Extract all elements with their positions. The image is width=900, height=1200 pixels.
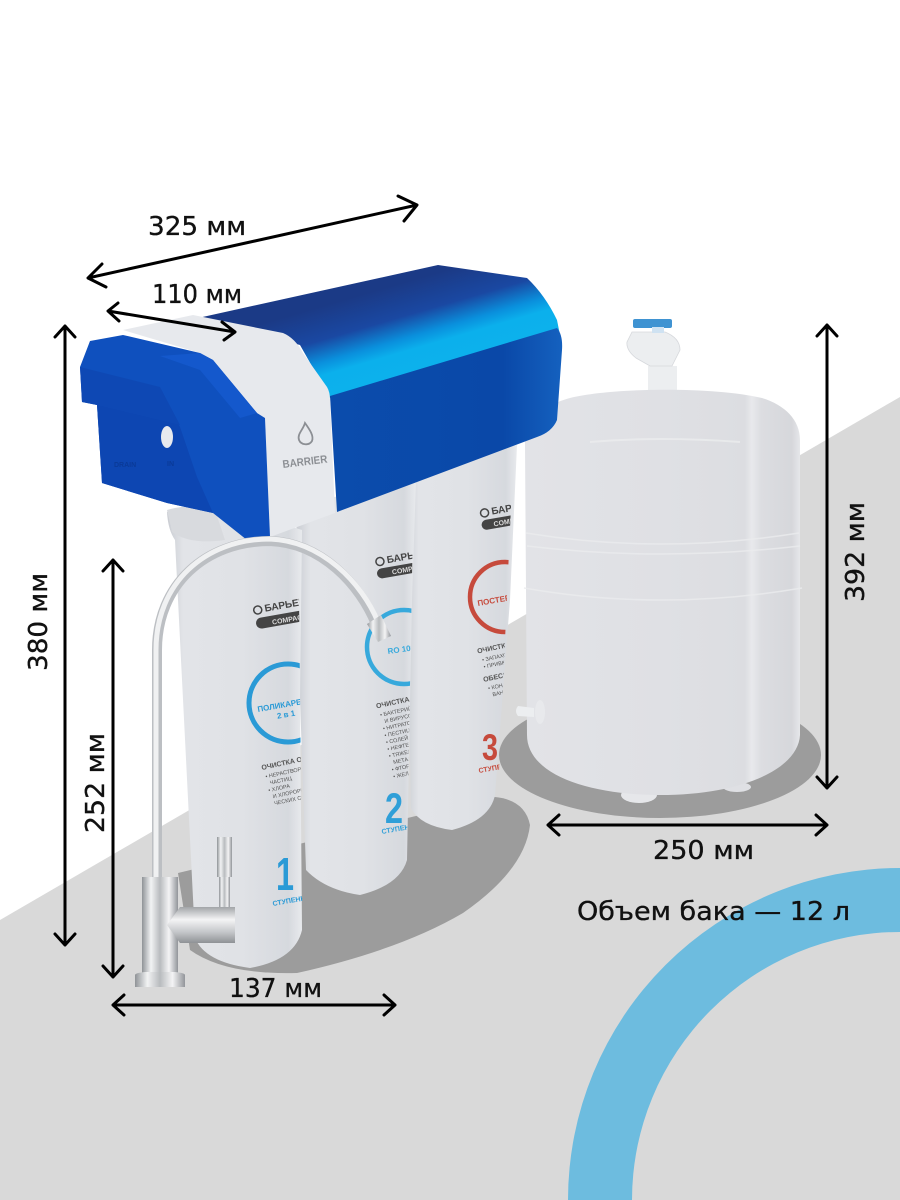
stage 2 text: МЕТАЛЛОВ (393, 754, 424, 766)
filter shadow (178, 797, 530, 973)
ring: поликарбон 2 в 1 (246, 662, 301, 744)
faucet base (135, 972, 185, 987)
front cover lip (80, 367, 180, 425)
front cover lower block (97, 388, 213, 513)
inlet port (161, 426, 173, 448)
faucet spout tube (156, 539, 378, 880)
brand label 3: COMPACT (493, 515, 529, 528)
gray floor background (0, 397, 900, 1200)
tank side port (516, 700, 545, 724)
lid side face (330, 328, 562, 512)
dimension: 380 mm: 380 мм (24, 573, 54, 671)
brand label 1: COMPACT (272, 614, 308, 627)
dimension: 380 mm (24, 326, 75, 945)
stage 1 text: И ХЛОРОРГАНИ- (272, 785, 317, 800)
stage 3 text: ОБЕСПЕЧ (483, 670, 518, 684)
stage 2 text: • СОЛЕЙ ЖЁСТКОСТИ (385, 726, 444, 746)
dimension: 250 mm (548, 815, 827, 866)
stage number 2: 2 (385, 785, 403, 833)
stage 1 text: • НЕРАСТВОРИМЫХ (265, 763, 319, 780)
filter 1 collar (167, 506, 225, 541)
filter cartridge 1: СТУПЕНЬ (272, 895, 306, 908)
filter cartridge 2: СТУПЕНЬ (381, 823, 415, 836)
stage 2 text: И ВИРУСОВ (384, 712, 417, 725)
control head unit (80, 265, 562, 540)
dimension: 252 mm (81, 560, 123, 977)
stage 2 text: • ТЯЖЕЛЫХ (388, 747, 421, 760)
stage 3 text: • ЗАПАХОВ (482, 652, 512, 664)
stage 2 text (376, 697, 410, 778)
faucet lever (217, 837, 232, 877)
faucet tip (367, 615, 391, 642)
dimension: 392 mm: 392 мм (841, 502, 871, 602)
ring: постеро (468, 560, 509, 634)
stage 1 text: • ХЛОРА (268, 784, 291, 794)
faucet (135, 539, 391, 987)
ring: RO 100 (364, 608, 412, 686)
tank ribs (524, 439, 802, 600)
filter cartridge 3 (410, 445, 517, 830)
faucet handle (167, 907, 235, 943)
dimension: 250 mm: 250 мм (653, 836, 754, 866)
stage 2 text: • ПЕСТИЦИДОВ (384, 725, 427, 739)
brand label 3 (480, 504, 511, 530)
dimension: 325 mm (88, 196, 417, 287)
tank feet (621, 787, 657, 803)
filter cartridge 1: 2 в 1 (276, 709, 296, 721)
stage 3 text: ОЧИСТКА (477, 642, 511, 656)
filter cartridge 3: СТУПЕНЬ (478, 762, 512, 775)
filter cartridge 2 (296, 482, 416, 895)
stage 1 text: ЧАСТИЦ (269, 776, 293, 787)
stage 3 text: ВАНИЕ ВОДЫ (492, 685, 529, 698)
port labels (114, 461, 174, 469)
faucet body (142, 877, 178, 973)
brand label 2: COMPACT (392, 563, 428, 577)
stage 2 text: • ФТОРА (391, 763, 414, 773)
dimension: 137 mm: 137 мм (229, 974, 322, 1004)
brand label 1: БАРЬЕР (264, 597, 307, 615)
port labels: IN (167, 461, 174, 468)
filter cartridge 2: RO 100 (387, 643, 416, 656)
storage tank (516, 319, 802, 803)
front cover silhouette (80, 335, 270, 540)
tank body (525, 390, 800, 795)
tank volume caption: Объем бака — 12 л (577, 897, 850, 927)
stage number 3: 3 (482, 727, 498, 768)
lid top face (198, 265, 562, 398)
stage 1 text: ЧЕСКИХ СОЕДИНЕНИЙ (273, 786, 336, 807)
brand label 2: БАРЬЕР (386, 548, 429, 566)
brand label 1 (253, 598, 300, 628)
stage number 1: 1 (276, 848, 294, 900)
stage 2 text: ОЧИСТКА ОТ (376, 694, 422, 710)
port labels: DRAIN (114, 462, 136, 469)
stage 3 text: • ПРИВКУСОВ (483, 657, 521, 671)
logo: drop and BARRIER: BARRIER (282, 454, 328, 471)
tank shadow (499, 692, 821, 818)
dimension: 137 mm (113, 974, 395, 1015)
white band (123, 315, 335, 537)
tank valve fitting (627, 319, 680, 390)
stage 2 text: • НИТРАТОВ (383, 720, 416, 732)
logo: drop and BARRIER (282, 423, 328, 471)
stage 2 text: • ЖЕЛЕЗА (393, 769, 420, 780)
brand label 2 (375, 552, 412, 578)
stage 2 text: • БАКТЕРИЙ (379, 704, 413, 719)
stage 3 text: • КОНДИЦИОН (488, 678, 527, 692)
dimension: 252 mm: 252 мм (81, 733, 111, 833)
brand label 3: БАРЬЕР (491, 500, 533, 518)
blue arc decoration (568, 868, 900, 1200)
filter cartridge 1: ПОЛИКАРБОН (257, 695, 315, 714)
dimension: 325 mm: 325 мм (148, 212, 246, 242)
filter cartridge 3: ПОСТЕРО (477, 592, 517, 608)
dimension: 110 mm: 110 мм (152, 280, 242, 310)
front cover highlight (160, 353, 257, 418)
dimension: 392 mm (817, 325, 871, 788)
dimension: 110 mm (108, 280, 242, 340)
stage 1 text: ОЧИСТКА ОТ (261, 755, 308, 772)
filter cartridge 1 (167, 506, 302, 968)
stage 1 text (262, 757, 302, 805)
stage 3 text (478, 643, 505, 696)
stage 2 text: • НЕФТЕПРОДУКТОВ (387, 736, 443, 753)
